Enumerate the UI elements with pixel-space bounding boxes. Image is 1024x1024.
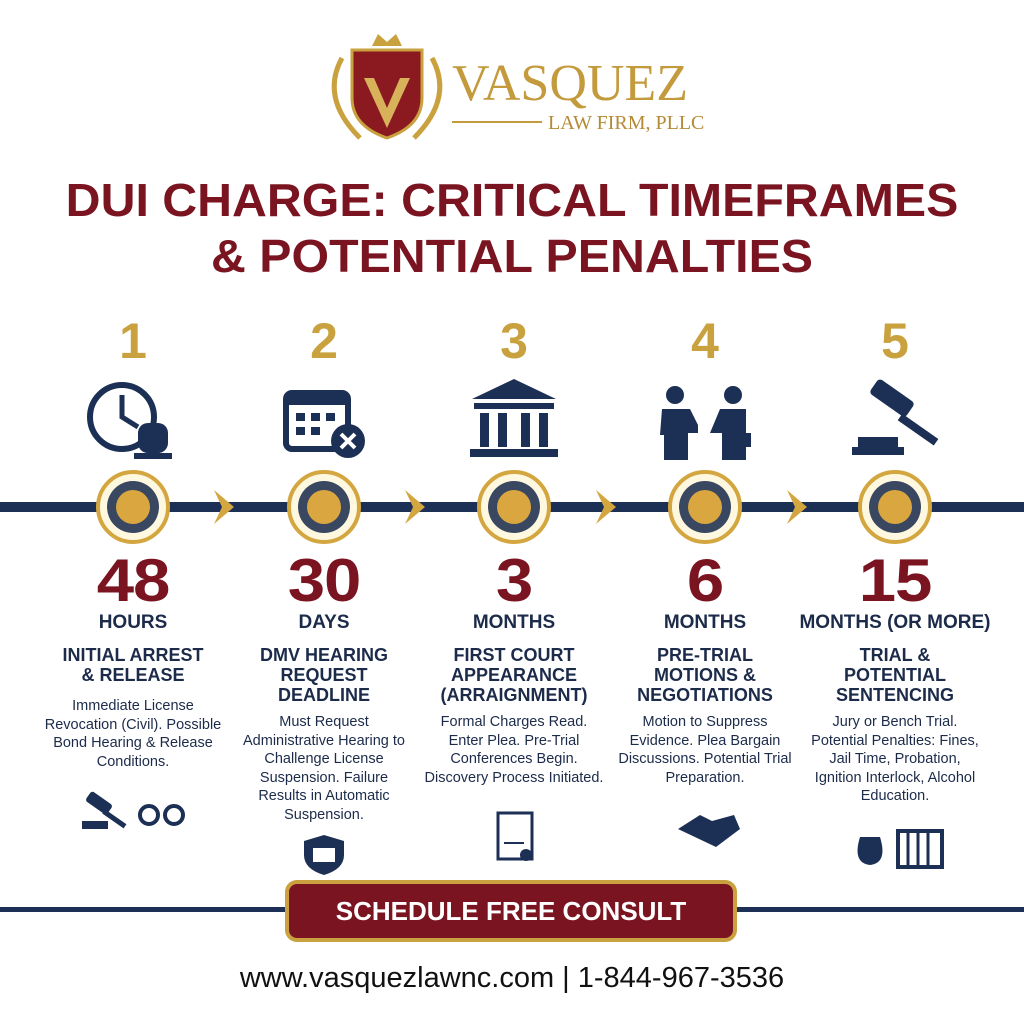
text: DAYS — [298, 612, 350, 633]
column 3: APPEARANCE — [451, 665, 577, 685]
column 3: (ARRAIGNMENT) — [440, 685, 587, 705]
column 4: PRE-TRIAL — [657, 645, 753, 665]
text: 15 — [859, 547, 931, 614]
column 1: & RELEASE — [81, 665, 185, 685]
text: 30 — [288, 547, 360, 614]
logo — [332, 34, 704, 140]
calendar — [286, 393, 365, 458]
title — [66, 174, 958, 282]
bottom rule — [0, 907, 1024, 912]
column 3: Formal Charges Read. Enter Plea. Pre-Trial Conferences Begin. Discovery Process Initiated. — [425, 714, 603, 786]
column 5: POTENTIAL — [844, 665, 946, 685]
button: schedule: SCHEDULE FREE CONSULT — [336, 896, 686, 926]
handshake people — [660, 386, 751, 460]
column 2: DEADLINE — [278, 685, 370, 705]
column 4: MOTIONS & — [654, 665, 756, 685]
column 3 — [425, 645, 603, 786]
clock — [90, 385, 172, 459]
shield — [352, 50, 422, 138]
courthouse — [470, 379, 558, 457]
contact line: www.vasquezlawnc.com | 1-844-967-3536 — [240, 962, 784, 994]
title: DUI CHARGE: CRITICAL TIMEFRAMES — [66, 174, 958, 226]
text: 3 — [500, 313, 528, 369]
units: HOURS — [99, 612, 167, 633]
logo: LAW FIRM, PLLC — [548, 112, 704, 134]
button: schedule — [285, 880, 737, 942]
column 1 — [45, 645, 221, 770]
column 1: INITIAL ARREST — [62, 645, 204, 665]
text: 5 — [881, 313, 909, 369]
text: 4 — [691, 313, 719, 369]
column 4: Motion to Suppress Evidence. Plea Bargain Discussions. Potential Trial Preparation. — [618, 714, 792, 786]
column 4 — [618, 645, 792, 786]
big numbers: 48 — [97, 547, 169, 614]
laurel — [334, 58, 440, 138]
column 3: FIRST COURT — [454, 645, 574, 665]
text: MONTHS (OR MORE) — [799, 612, 991, 633]
text: 2 — [310, 313, 338, 369]
text: 3 — [496, 547, 532, 614]
column 4: NEGOTIATIONS — [637, 685, 773, 705]
text: 6 — [687, 547, 723, 614]
text: MONTHS — [664, 612, 746, 633]
column 1: Immediate License Revocation (Civil). Possible Bond Hearing & Release Conditions. — [45, 698, 221, 770]
column 2: REQUEST — [280, 665, 368, 685]
step numbers: 1 — [119, 313, 147, 369]
gavel — [852, 378, 938, 455]
column 2: Must Request Administrative Hearing to Challenge License Suspension. Failure Results in Automatic Suspension. — [243, 714, 405, 822]
column 5 — [811, 645, 979, 804]
column 2 — [243, 645, 405, 822]
text: MONTHS — [473, 612, 555, 633]
column 2: DMV HEARING — [260, 645, 388, 665]
logo: VASQUEZ — [452, 55, 688, 112]
column 5: SENTENCING — [836, 685, 954, 705]
column 5: Jury or Bench Trial. Potential Penalties: Fines, Jail Time, Probation, Ignition Interlock, Alcohol Education. — [811, 714, 979, 804]
column 5: TRIAL & — [860, 645, 930, 665]
icons top — [87, 379, 938, 460]
title: & POTENTIAL PENALTIES — [211, 230, 813, 282]
timeline — [0, 470, 1024, 544]
crown — [372, 34, 402, 46]
small icons — [82, 792, 944, 875]
